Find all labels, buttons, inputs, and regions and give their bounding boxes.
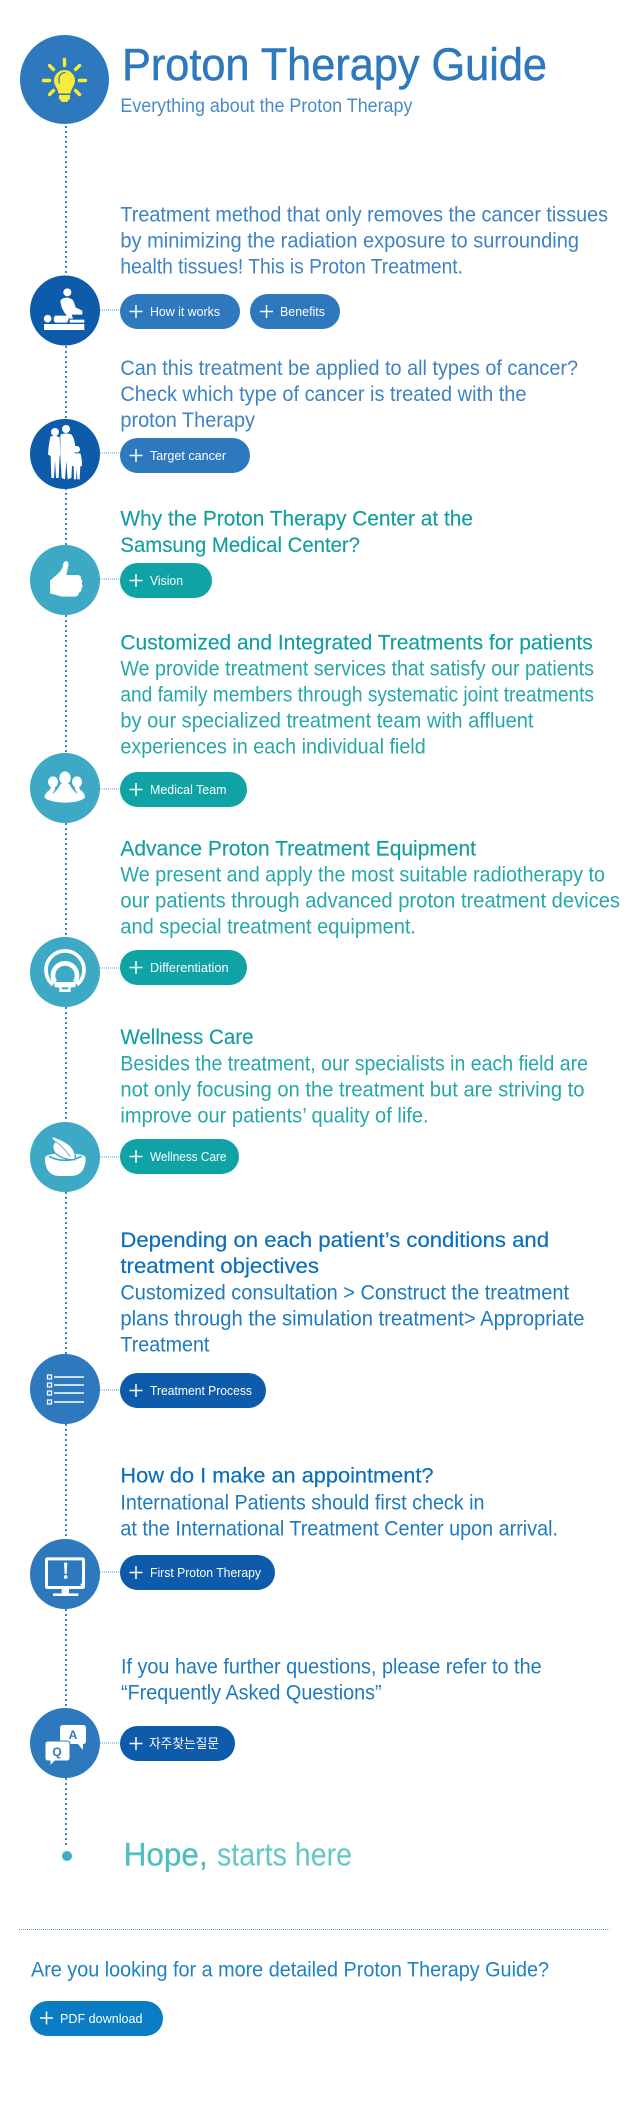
text block xyxy=(121,1656,542,1704)
button: wellness care: Wellness Care xyxy=(150,1149,226,1164)
heading xyxy=(120,508,473,557)
icon: massage treatment xyxy=(30,276,100,346)
text block: We provide treatment services that satisfy our patients xyxy=(120,657,594,680)
text block: health tissues! This is Proton Treatment. xyxy=(120,256,463,278)
text block: experiences in each individual field xyxy=(120,736,426,758)
text block: by minimizing the radiation exposure to surrounding xyxy=(120,230,579,252)
text block: Treatment xyxy=(120,1333,210,1356)
text block: and family members through systematic joint treatments xyxy=(120,683,594,706)
heading: Depending on each patient’s conditions and xyxy=(120,1229,549,1252)
slogan xyxy=(124,1836,352,1872)
button: vision: Vision xyxy=(150,573,183,588)
connector xyxy=(100,1742,120,1744)
button: medical team xyxy=(120,772,247,807)
button: differentiation: Differentiation xyxy=(150,960,229,975)
heading: Why the Proton Therapy Center at the xyxy=(120,508,473,531)
text block: and special treatment equipment. xyxy=(120,916,416,939)
heading: treatment objectives xyxy=(120,1255,319,1278)
button: treatment process xyxy=(120,1373,266,1408)
icon: q and a bubbles: Q xyxy=(52,1745,62,1759)
text block: Besides the treatment, our specialists in each field are xyxy=(120,1052,588,1076)
connector xyxy=(100,1156,120,1158)
button: medical team: Medical Team xyxy=(150,782,226,797)
slogan: starts here xyxy=(217,1836,352,1872)
icon: q and a bubbles: A xyxy=(69,1728,78,1742)
text block: proton Therapy xyxy=(120,409,255,432)
button: benefits xyxy=(250,294,340,329)
button: wellness care xyxy=(120,1139,239,1174)
button: benefits: Benefits xyxy=(280,304,325,319)
icon: family xyxy=(30,419,100,489)
text block: not only focusing on the treatment but are striving to xyxy=(120,1078,585,1102)
connector xyxy=(100,309,120,311)
text block: at the International Treatment Center upon arrival. xyxy=(120,1517,558,1540)
section: first proton therapy xyxy=(30,1465,558,1609)
button: faq: 자주찾는질문 xyxy=(149,1736,219,1751)
button: vision xyxy=(120,563,212,598)
text block: “Frequently Asked Questions” xyxy=(121,1682,382,1704)
icon: herbal bowl xyxy=(30,1122,100,1192)
text block xyxy=(120,357,578,432)
slogan: Hope, xyxy=(124,1836,208,1872)
section: medical team xyxy=(30,631,594,823)
text block: International Patients should first check in xyxy=(120,1491,485,1514)
header xyxy=(20,35,547,124)
icon: light bulb xyxy=(20,35,109,124)
section: differentiation xyxy=(30,838,620,1007)
connector xyxy=(100,578,120,580)
icon: monitor alert xyxy=(30,1539,100,1609)
text block: our patients through advanced proton treatment devices xyxy=(120,890,620,913)
icon: q and a bubbles xyxy=(30,1708,100,1778)
text block: If you have further questions, please refer to the xyxy=(121,1656,542,1678)
text block xyxy=(120,1052,588,1128)
button: target cancer xyxy=(120,438,250,473)
button: differentiation xyxy=(120,950,247,985)
text block: improve our patients’ quality of life. xyxy=(120,1104,429,1128)
timeline: dotted vertical line xyxy=(65,126,67,1846)
icon: thumbs up xyxy=(30,545,100,615)
heading: Customized and Integrated Treatments for patients xyxy=(120,631,593,654)
section: wellness care xyxy=(30,1026,588,1192)
timeline end dot xyxy=(62,1851,72,1861)
text block xyxy=(120,1281,585,1356)
button: first proton therapy xyxy=(120,1555,275,1590)
button: how it works xyxy=(120,294,240,329)
text block xyxy=(120,657,594,758)
button: treatment process: Treatment Process xyxy=(150,1383,252,1398)
section: how it works xyxy=(30,204,608,346)
button: pdf download xyxy=(30,2001,163,2036)
button: how it works: How it works xyxy=(150,304,220,319)
section: faq xyxy=(30,1656,542,1778)
heading: How do I make an appointment? xyxy=(120,1465,434,1488)
text block: Check which type of cancer is treated with the xyxy=(120,383,527,406)
button: faq xyxy=(120,1726,235,1761)
text block: by our specialized treatment team with affluent xyxy=(120,709,534,732)
icon: proton treatment device xyxy=(30,937,100,1007)
connector xyxy=(100,967,120,969)
text block xyxy=(120,204,608,278)
heading: Samsung Medical Center? xyxy=(120,534,360,557)
section: treatment process xyxy=(30,1229,584,1424)
button: target cancer: Target cancer xyxy=(150,448,227,463)
button: first proton therapy: First Proton Therapy xyxy=(150,1565,261,1580)
heading: Wellness Care xyxy=(120,1026,254,1049)
title: Proton Therapy Guide xyxy=(122,39,547,90)
connector xyxy=(100,788,120,790)
text block xyxy=(120,864,620,939)
pdf download panel xyxy=(30,1958,549,2036)
text block: Treatment method that only removes the cancer tissues xyxy=(120,204,608,226)
section: vision xyxy=(30,508,473,615)
question text: Are you looking for a more detailed Proton Therapy Guide? xyxy=(31,1958,549,1981)
connector xyxy=(100,452,120,454)
heading xyxy=(120,1229,549,1278)
text block: plans through the simulation treatment> Appropriate xyxy=(120,1307,585,1330)
text block: We present and apply the most suitable radiotherapy to xyxy=(120,864,605,887)
icon: checklist xyxy=(30,1354,100,1424)
text block: Can this treatment be applied to all types of cancer? xyxy=(120,357,578,380)
heading: Advance Proton Treatment Equipment xyxy=(120,838,476,861)
connector xyxy=(100,1571,120,1573)
section: target cancer xyxy=(30,357,578,489)
text block xyxy=(120,1491,558,1540)
icon: team xyxy=(30,753,100,823)
connector xyxy=(100,1389,120,1391)
text block: Customized consultation > Construct the treatment xyxy=(120,1281,569,1304)
button: pdf download: PDF download xyxy=(60,2011,142,2026)
subtitle: Everything about the Proton Therapy xyxy=(120,96,413,117)
